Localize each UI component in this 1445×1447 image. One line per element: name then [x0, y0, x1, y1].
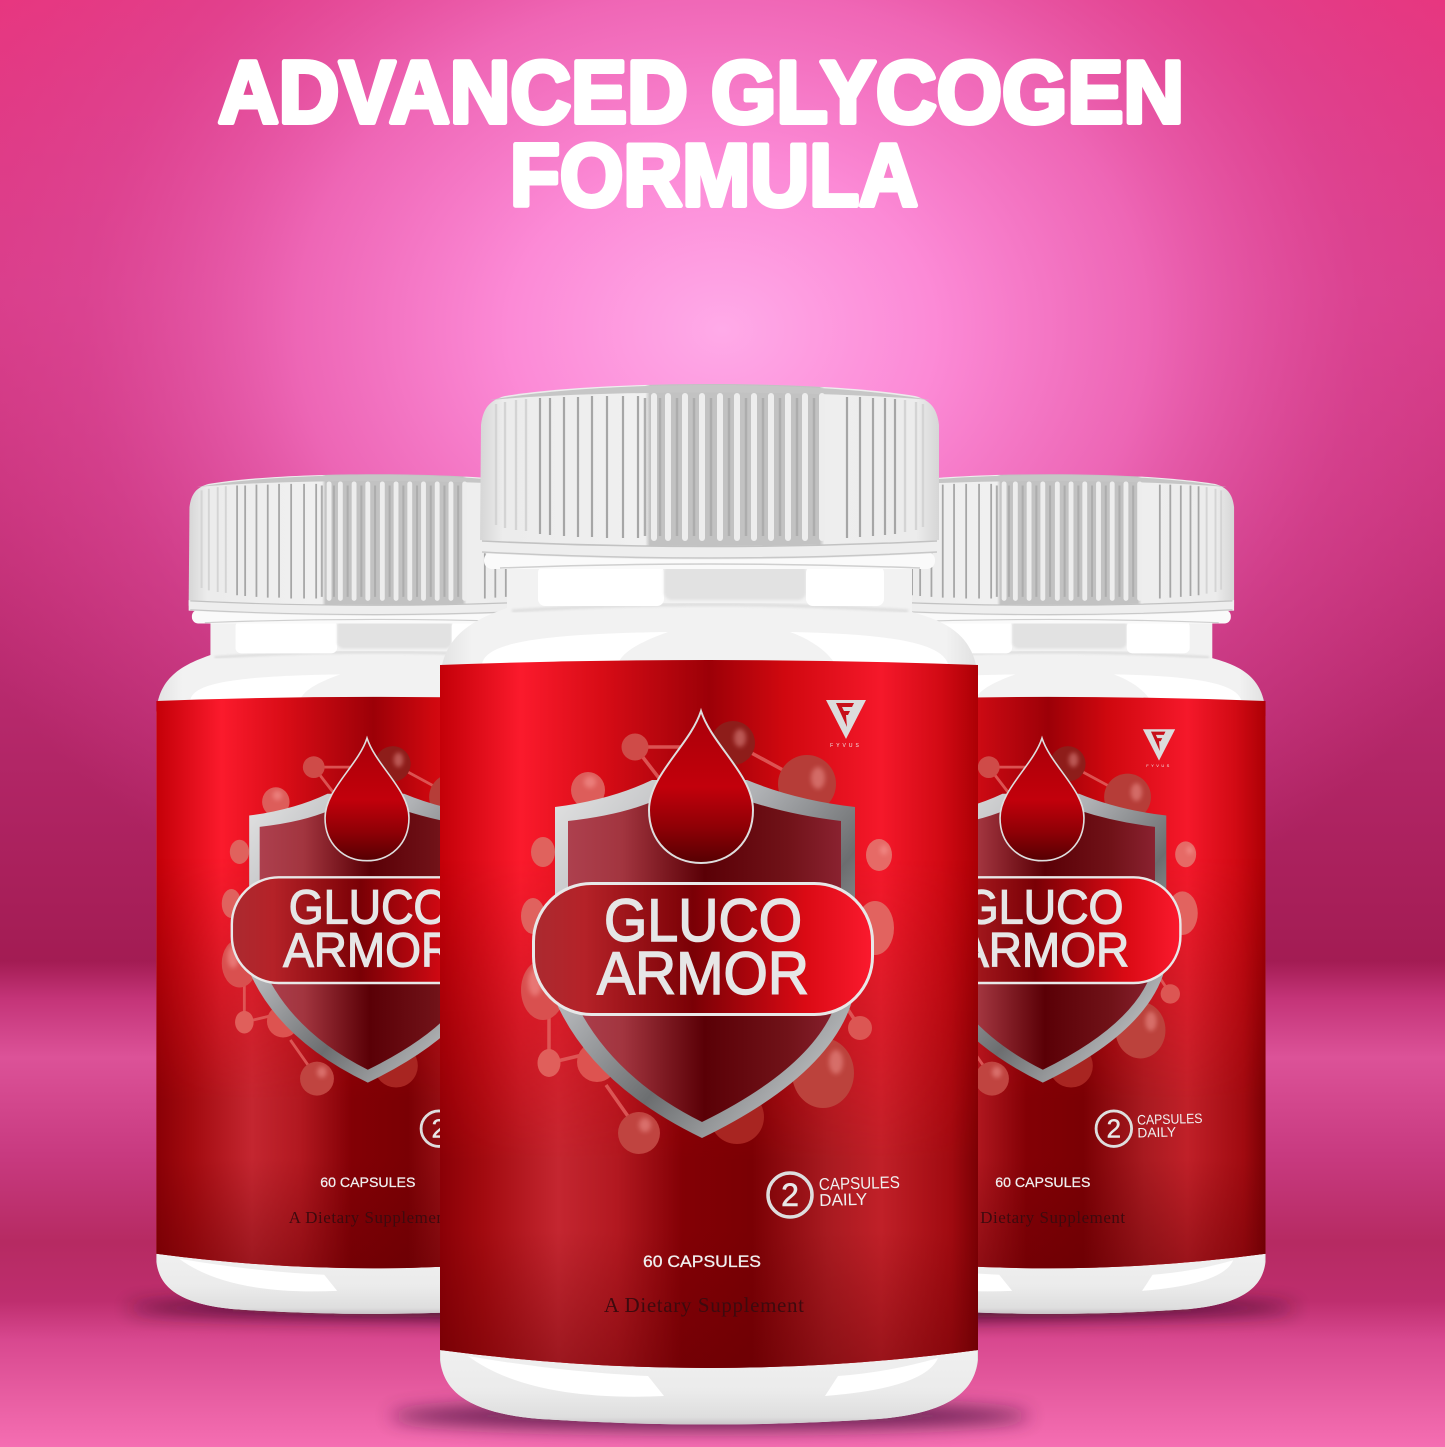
background wall — [0, 0, 1445, 975]
left bottle: A Dietary Supplement — [289, 1208, 450, 1227]
floor shadow: rear bottles — [127, 1297, 1297, 1319]
background floor — [0, 960, 1445, 1447]
right bottle — [831, 474, 1266, 1314]
bottle cap — [480, 384, 939, 560]
dosage badge — [768, 1173, 900, 1217]
title — [218, 42, 1184, 224]
icon: brand mark — [826, 700, 866, 739]
right bottle: A Dietary Supplement — [964, 1208, 1125, 1227]
supplement note: A Dietary Supplement — [604, 1293, 804, 1317]
left bottle: DAILY — [462, 1125, 501, 1141]
title: ADVANCED GLYCOGEN — [218, 42, 1184, 142]
left bottle: GLUCO — [289, 881, 449, 935]
left bottle: FYVUS — [471, 763, 497, 768]
capsule count: 60 CAPSULES — [643, 1252, 761, 1271]
red label — [440, 660, 978, 1368]
shield emblem — [555, 780, 855, 1138]
left bottle: ARMOR — [283, 923, 454, 977]
brand name line two: ARMOR — [597, 940, 809, 1007]
right bottle: 2 — [1107, 1116, 1121, 1144]
brand mark caption: FYVUS — [830, 743, 862, 749]
product name pill — [534, 884, 872, 1014]
dosage badge: DAILY — [819, 1190, 867, 1210]
background glow — [0, 0, 1445, 975]
blood drop icon — [649, 711, 753, 863]
right bottle: GLUCO — [964, 881, 1124, 935]
right bottle: DAILY — [1137, 1125, 1176, 1141]
brand name line one: GLUCO — [604, 887, 802, 954]
floor shadow: front bottle — [390, 1402, 1030, 1430]
right bottle: FYVUS — [1146, 763, 1172, 768]
bottle body — [440, 552, 978, 1424]
dosage badge: 2 — [781, 1177, 799, 1213]
left bottle: CAPSULES — [462, 1111, 528, 1128]
left bottle: 60 CAPSULES — [320, 1175, 415, 1190]
left bottle — [156, 474, 591, 1314]
right bottle: 60 CAPSULES — [995, 1175, 1090, 1190]
title: FORMULA — [510, 126, 918, 224]
left bottle: 2 — [432, 1116, 446, 1144]
front bottle — [440, 384, 978, 1424]
right bottle: CAPSULES — [1137, 1111, 1203, 1128]
molecule decoration — [521, 721, 894, 1154]
dosage badge: CAPSULES — [819, 1173, 900, 1194]
right bottle: ARMOR — [958, 923, 1129, 977]
